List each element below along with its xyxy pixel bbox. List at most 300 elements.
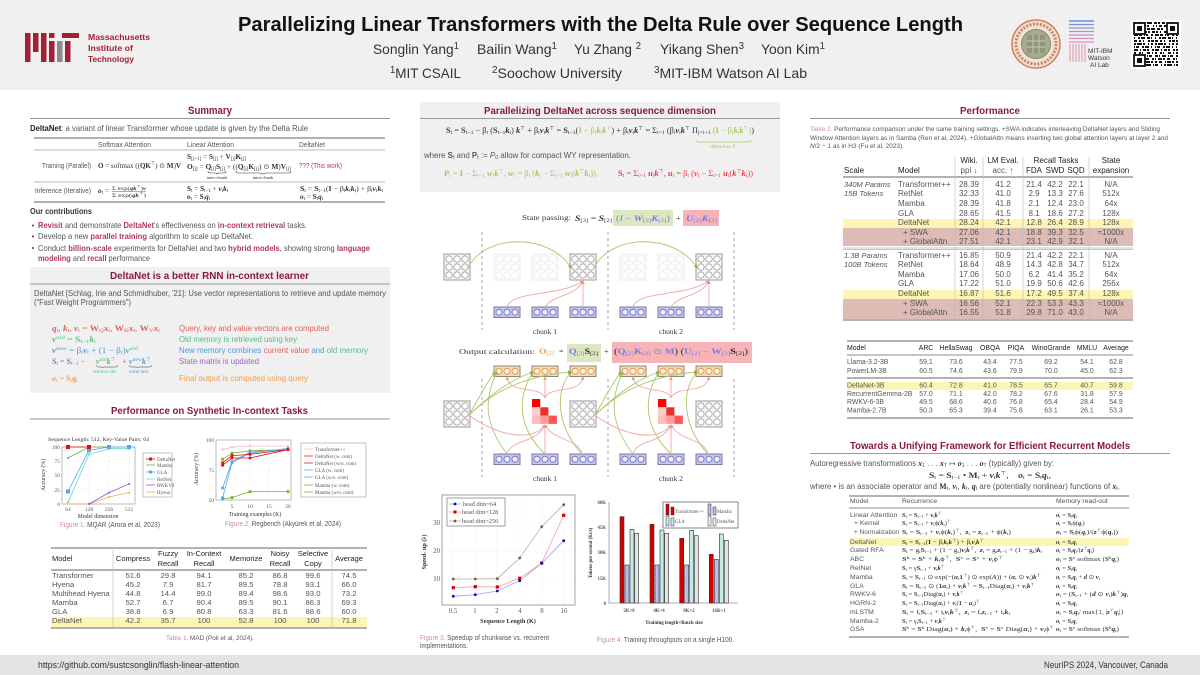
table 2: performance comparison: DeltaNet <box>898 289 930 298</box>
table 2: performance comparison: SWD <box>1046 166 1065 175</box>
memory read-out formulas: ot = Stqt <box>1056 583 1078 590</box>
update equations <box>52 324 161 384</box>
table 2: performance comparison: Transformer++ <box>898 251 951 260</box>
table 2: performance comparison: 22.1 <box>1068 180 1084 189</box>
formula: state passing: S[3] = S[2] <box>575 214 612 224</box>
table 1: MAD results: 85.2 <box>239 571 253 580</box>
table 2: performance comparison: 17.2 <box>1026 289 1042 298</box>
table 1: MAD results: 42.2 <box>126 616 140 625</box>
table 3: benchmark comparison: 73.6 <box>949 359 963 366</box>
table 1: MAD results: Compress <box>116 554 150 563</box>
heading: unifying framework: Towards a Unifying Framework for Efficient Recurrent Models <box>850 440 1130 452</box>
intro text: Autoregressive transformations x1 . . . xT ↦ o1 . . . oT (typically) given by: <box>810 459 1054 469</box>
caption: table 2: N/2 − 1 as in H3 (Fu et al, 2023). <box>810 143 904 150</box>
table 2: performance comparison: 16.85 <box>959 251 980 260</box>
table 2: performance comparison: 28.39 <box>959 199 980 208</box>
table 3: benchmark comparison: 78.2 <box>1009 391 1023 398</box>
table 2: performance comparison: 42.8 <box>1047 260 1063 269</box>
table 2: performance comparison: 27.51 <box>959 237 980 246</box>
update equations: St = St−1 − <box>52 357 87 367</box>
legend: Mamba <box>717 510 733 515</box>
formula: output calculation: Q[2]S[2] <box>569 347 598 357</box>
pink input connections <box>507 281 709 307</box>
chart: figure 2 Regbench: GLA (w. com) <box>315 469 344 474</box>
table 3: benchmark comparison: 69.2 <box>1044 359 1058 366</box>
chart: figure 4 throughput: Training length×Batch size <box>645 621 704 626</box>
recurrence formulas <box>902 511 1054 633</box>
chart: figure 2 Regbench: Transformer++ <box>315 448 346 453</box>
table 3: benchmark comparison: 40.7 <box>1080 382 1094 390</box>
chart: figure 1 MQAR: 256 <box>105 507 113 513</box>
update equations: vnewk⊤ <box>129 356 151 366</box>
logo: MIT-IBM Watson AI Lab <box>1069 21 1113 69</box>
chart: figure 1 MQAR: Sequence Length: 512, Key-Value Pairs: 64 <box>48 437 149 443</box>
table 2: performance comparison: 52.1 <box>995 299 1011 308</box>
table 3: benchmark comparison: 74.6 <box>949 368 963 375</box>
table 4: recurrent models: Memory read-out <box>1056 498 1108 505</box>
table 3: benchmark comparison: 65.4 <box>1044 399 1058 406</box>
table 2: performance comparison: 128x <box>1102 289 1120 298</box>
chart: figure 3 speedup: 30 <box>433 520 441 527</box>
chart: figure 2 Regbench: 10 <box>247 504 253 510</box>
table 3: benchmark comparison: 79.9 <box>1009 368 1023 375</box>
chunk labels: chunk 1 <box>533 474 557 483</box>
comparison table: Inference (Iterative) <box>35 186 91 195</box>
table 2: performance comparison: ≈1000x <box>1098 228 1124 237</box>
chart: figure 2 Regbench: 20 <box>285 504 291 510</box>
table 1: MAD results: 89.4 <box>239 589 254 598</box>
table 1: MAD results: 7.9 <box>163 580 173 589</box>
logo: MIT: Technology <box>88 55 135 64</box>
table 1: MAD results: 100 <box>274 616 286 625</box>
table 2: performance comparison: GLA <box>898 209 915 218</box>
table 2: performance comparison: 21.4 <box>1026 251 1042 260</box>
table 2: performance comparison: 41.4 <box>1047 270 1063 279</box>
table 2: performance comparison: 43.3 <box>1068 299 1084 308</box>
contributions list <box>32 221 370 263</box>
table 2: performance comparison: 41.8 <box>995 199 1011 208</box>
table 2: performance comparison: DeltaNet <box>898 218 930 227</box>
table 4: recurrent models: + Normalization <box>854 529 899 536</box>
table 3: benchmark comparison: 62.3 <box>1109 368 1123 375</box>
caption: figure 3: Figure 3. Speedup of chunkwise vs. recurrent <box>420 635 549 642</box>
table 2: performance comparison: 32.5 <box>1068 228 1084 237</box>
table 4: recurrent models: GLA <box>850 583 864 590</box>
memory read-out formulas: ot = Stqt <box>1056 512 1078 519</box>
update equations: vold = St−1kt <box>52 335 97 345</box>
table 2: performance comparison: 42.2 <box>1047 251 1063 260</box>
table 2: performance comparison: Transformer++ <box>898 180 951 189</box>
logo: MIT: Massachusetts <box>88 33 151 42</box>
table 4: recurrent models: Mamba-2 <box>850 618 879 625</box>
formula: state passing: U [2]K [2] <box>686 214 717 224</box>
description: ("Fast Weight Programmers") <box>34 298 131 307</box>
table 2: performance comparison: FDA <box>1026 166 1043 175</box>
intro text: DeltaNet: a variant of linear Transformer whose update is given by the Delta Rule <box>30 123 308 133</box>
description: DeltaNet [Schlag, Irie and Schmidhuber, '21]: Use vector representations to retrieve and update memory <box>34 289 387 298</box>
table 4: recurrent models: RWKV-6 <box>850 591 876 598</box>
formula: output calculation: O[2] <box>539 346 554 357</box>
chart: figure 2 Regbench: 75 <box>208 468 214 474</box>
comparison table: St = St−1(I − βtktkt) + βtvtkt <box>300 185 384 194</box>
comparison table: Softmax Attention <box>98 140 151 149</box>
chart: figure 3 speedup: head dim=128 <box>462 509 498 516</box>
table 4: recurrent models: ABC <box>850 556 864 563</box>
chart: figure 3 speedup: 2 <box>495 608 499 615</box>
caption: figure 2: Figure 2. Regbench (Akyürek et al, 2024) <box>225 521 341 528</box>
diagram: output calculation per chunk <box>444 366 734 483</box>
memory read-out formulas: ot = (St−1 + (d ⊙ vt)k⊤)qt <box>1056 590 1129 598</box>
table 4: recurrent models: RetNet <box>850 565 871 572</box>
table 1: MAD results: Memorize <box>230 554 262 563</box>
table 3: benchmark comparison: RWKV-6-3B <box>847 399 884 406</box>
logo: MIT-IBM Watson AI Lab: Watson <box>1088 55 1110 62</box>
chart: figure 2 Regbench: 5 <box>231 504 234 510</box>
chunk labels: chunk 1 <box>533 327 557 336</box>
table 1: MAD results: GLA <box>52 607 68 616</box>
chunk labels: chunk 2 <box>659 327 683 336</box>
table 2: performance comparison: 18.64 <box>959 260 980 269</box>
table 1: MAD results: 88.6 <box>306 607 320 616</box>
memory read-out formulas: ot = Stqt/ max{1, | z⊤qt|} <box>1056 608 1124 616</box>
table 4: recurrent models: Linear Attention <box>850 512 897 519</box>
table 3: benchmark comparison: 43.6 <box>983 368 997 375</box>
table 3: benchmark comparison: 50.3 <box>919 408 933 414</box>
chart: figure 1 MQAR <box>40 437 176 520</box>
footer band <box>0 655 1200 675</box>
chart: figure 3 speedup: 0.5 <box>449 608 458 615</box>
table 4: recurrent models <box>849 496 1129 637</box>
memory read-out formulas: ot = Stqt <box>1056 539 1078 546</box>
underbrace: defined as P <box>696 140 751 150</box>
table 3: benchmark comparison: 65.7 <box>1044 382 1058 390</box>
output rows <box>494 366 722 376</box>
table 1: MAD results: 89.5 <box>239 598 253 607</box>
table 2: performance comparison: 43.0 <box>1068 308 1084 317</box>
formula: state passing: + <box>676 214 681 223</box>
affiliations: 2Soochow University <box>492 65 622 81</box>
caption: figure 3 <box>420 635 549 650</box>
table 1: MAD results: 100 <box>307 616 319 625</box>
table 1: MAD results: Recall <box>270 559 291 568</box>
attention matrices <box>532 399 683 424</box>
update equations: voldk⊤ <box>96 356 116 366</box>
panel: performance <box>810 105 1170 418</box>
chart: figure 2 Regbench: Mamba (w. com) <box>315 484 350 489</box>
table 1: MAD results: 66.0 <box>342 580 356 589</box>
formula: output calculation: + <box>604 347 609 356</box>
table 2: performance comparison: 37.4 <box>1068 289 1084 298</box>
table 3: benchmark comparison: 42.0 <box>983 391 997 398</box>
panel: towards a unifying framework <box>809 440 1170 637</box>
caption: figure 3: implementations. <box>420 643 468 650</box>
table 1: MAD results: Copy <box>304 559 322 568</box>
table 2: performance comparison: 64x <box>1105 199 1117 208</box>
equation: general recurrence: St = St−1 • M t + vtk⊤, ot = Stqt, <box>929 470 1051 481</box>
table 2: performance comparison: 34.7 <box>1068 260 1084 269</box>
table 1: MAD results: 81.6 <box>273 607 287 616</box>
table 2: performance comparison: 42.6 <box>1068 279 1084 288</box>
caption: figure 1: Figure 1. MQAR (Arora et al, 2023) <box>60 522 160 529</box>
table 2: performance comparison: 42.9 <box>1047 237 1063 246</box>
table 2: performance comparison: State <box>1102 156 1121 165</box>
legend: Transformer++ <box>675 510 705 515</box>
table 1: MAD results: Hyena <box>52 580 75 589</box>
chart: figure 2 Regbench: 100 <box>206 438 214 444</box>
chart: figure 3 speedup: 1 <box>473 608 477 615</box>
table 2: performance comparison: N/A <box>1104 308 1118 317</box>
table 2: performance comparison: 340M Params <box>844 180 891 189</box>
table 4: recurrent models: HGRN-2 <box>850 600 876 607</box>
table 1: MAD results: 14.4 <box>161 589 176 598</box>
caption: figure 4: Figure 4. Training throughputs on a single H100. <box>597 637 734 644</box>
table 2: performance comparison: 42.1 <box>995 237 1011 246</box>
chart: figure 1 MQAR: Model dimension <box>78 514 118 520</box>
table 2: performance comparison: 2.9 <box>1028 189 1040 198</box>
table 3: benchmark comparison: 77.5 <box>1009 359 1023 366</box>
table 1: MAD results: Transformer <box>52 571 94 580</box>
contributions list: Conduct billion-scale experiments for DeltaNet and two hybrid models, showing strong language <box>38 244 370 253</box>
chart: figure 1 MQAR: 128 <box>85 507 93 513</box>
input rows <box>494 454 722 464</box>
table 2: performance comparison: 128x <box>1102 218 1120 227</box>
repository link: https://github.com/sustcsonglin/flash-linear-attention <box>38 660 239 671</box>
comparison table: St = St−1 + vtkt <box>187 185 229 194</box>
table 1: MAD results: Recall <box>158 559 179 568</box>
comparison table: ot = <box>98 187 109 196</box>
equation descriptions: Old memory is retrieved using key <box>179 335 298 344</box>
table 1: MAD results: 63.3 <box>239 607 253 616</box>
heading: our contributions: Our contributions <box>30 206 92 216</box>
table 1: MAD results: 6.9 <box>163 607 173 616</box>
chart: figure 4 throughput <box>589 501 738 626</box>
table 1: MAD results: 29.8 <box>161 571 175 580</box>
chart: figure 2 Regbench: Mamba (w/o. com) <box>315 491 354 496</box>
table 2: performance comparison: 50.9 <box>995 251 1011 260</box>
table 3: benchmark comparison: 45.0 <box>1080 368 1094 375</box>
memory read-out formulas: ot = Stqt/(z⊤qt) <box>1056 546 1094 554</box>
table 2: performance comparison: 1.3B Params <box>844 251 888 260</box>
table 2: performance comparison: 29.8 <box>1026 308 1042 317</box>
table 3: benchmark comparison: 39.4 <box>983 408 997 414</box>
comparison table: ??? (This work) <box>299 161 342 170</box>
authors: Yikang Shen3 <box>660 41 745 57</box>
chart: figure 4 throughput: 15K <box>597 577 606 582</box>
table 2: performance comparison: 32.33 <box>959 189 980 198</box>
table 2: performance comparison: LM Eval. <box>987 156 1019 165</box>
table 3: benchmark comparison: DeltaNet-3B <box>847 382 885 390</box>
chart: figure 2 Regbench: DeltaNet (w/o. com) <box>315 462 357 467</box>
table 1: MAD results: 90.4 <box>197 598 212 607</box>
table 1: MAD results: 98.6 <box>273 589 287 598</box>
throughput bars <box>620 517 728 603</box>
table 3: benchmark comparison: 75.8 <box>1009 408 1023 414</box>
table 1: MAD results: 86.8 <box>273 571 287 580</box>
chunk labels <box>533 474 683 483</box>
chart: figure 1 MQAR: RWKV4 <box>157 484 175 489</box>
legend: DeltaNet <box>717 520 735 525</box>
chart: figure 3 speedup: head dim=256 <box>462 518 498 525</box>
memory read-out formulas: ot = Stϕ(qt) <box>1056 520 1085 527</box>
memory read-out formulas: ot = Sv softmax ( Skqt) <box>1056 625 1119 633</box>
chart: figure 2 Regbench: GLA (w/o. com) <box>315 476 349 481</box>
logo: MIT-IBM Watson AI Lab: MIT-IBM <box>1088 48 1113 55</box>
table 2: performance comparison: 32.1 <box>1068 237 1084 246</box>
chart: figure 2 Regbench: Accuracy (%) <box>193 453 200 485</box>
table 2: performance comparison: 16.56 <box>959 299 980 308</box>
table 1: MAD results: 45.2 <box>126 580 140 589</box>
chart: figure 1 MQAR: 64 <box>65 507 71 513</box>
memory read-out formulas: ot = Stϕ(qt)/(z⊤ϕ(qt)) <box>1056 528 1118 536</box>
formula: output calculation <box>459 342 752 363</box>
table 2: performance comparison: 8.1 <box>1028 209 1040 218</box>
table 2: performance comparison: 27.2 <box>1068 209 1084 218</box>
comparison table: Σ exp( qk⊤)v <box>112 185 147 192</box>
memory read-out formulas: ot = Sv softmax ( Skqt) <box>1056 555 1119 563</box>
table 2: performance comparison: 50.0 <box>995 270 1011 279</box>
authors: Yu Zhang 2 <box>574 41 641 57</box>
table 2: performance comparison: + GlobalAttn <box>903 308 947 317</box>
table 2: performance comparison: 49.5 <box>1047 289 1063 298</box>
table 2: performance comparison: Recall Tasks <box>1034 156 1078 165</box>
table 3: benchmark comparison: 41.0 <box>983 382 997 390</box>
table 3: benchmark comparison: 72.8 <box>949 382 963 390</box>
table 2: performance comparison: Mamba <box>898 199 925 208</box>
table 1: MAD results: 35.7 <box>161 616 175 625</box>
formula: state passing: (I − W [2]K [2]) <box>616 214 670 224</box>
chart: figure 3 speedup: 4 <box>518 608 522 615</box>
memory read-out formulas <box>1056 512 1129 633</box>
table 2: performance comparison: 2.1 <box>1028 199 1040 208</box>
table 2: performance comparison: 41.0 <box>995 189 1011 198</box>
memory read-out formulas: ot = Stqt + d ⊙ vt <box>1056 574 1101 581</box>
table 1: MAD results: Mamba <box>52 598 78 607</box>
table 3: benchmark comparison: 59.8 <box>1109 382 1123 390</box>
comparison table: Linear Attention <box>187 140 234 149</box>
table 3: benchmark comparison: 76.8 <box>1009 399 1023 406</box>
panel: performance on synthetic in-context tasks <box>30 405 390 642</box>
affiliations: 3MIT-IBM Watson AI Lab <box>654 65 807 81</box>
memory read-out formulas: ot = Stqt <box>1056 600 1078 607</box>
table 1: MAD results: 99.6 <box>306 571 320 580</box>
table 3: benchmark comparison: PowerLM-3B <box>847 368 887 375</box>
table 1: MAD results: Recall <box>194 559 215 568</box>
table 2: performance comparison: + SWA <box>903 299 928 308</box>
table 2: performance comparison: 28.9 <box>1068 218 1084 227</box>
chart: figure 3 speedup: 10 <box>433 576 441 583</box>
recurrence formulas: St = St−1 + vtk⊤ <box>902 511 942 519</box>
table 2: performance comparison: acc. ↑ <box>993 166 1013 175</box>
authors <box>373 41 825 57</box>
table 2: performance comparison: RetNet <box>898 189 924 198</box>
table 2: performance comparison: 53.3 <box>1047 299 1063 308</box>
table 3: benchmark comparison: 54.9 <box>1109 399 1123 406</box>
affiliations <box>390 65 807 81</box>
authors: Bailin Wang1 <box>477 41 557 57</box>
table 1: MAD results: 89.5 <box>239 580 253 589</box>
chart: figure 4 throughput: 4K×4 <box>653 609 665 614</box>
table 2: performance comparison: 13.3 <box>1047 189 1063 198</box>
contributions list: modeling and recall performance <box>38 254 150 263</box>
recurrence formulas: Sk = Sk Diag( αt) + ktϕ⊤, Sv = Sv Diag( αt) + vtϕ⊤ <box>902 625 1054 633</box>
table 2: performance comparison: 12.8 <box>1026 218 1042 227</box>
chart: figure 2 Regbench: DeltaNet (w. com) <box>315 455 352 460</box>
table 1: MAD results: Model <box>52 554 73 563</box>
logo: MIT-IBM Watson AI Lab: AI Lab <box>1090 62 1109 69</box>
chart: figure 1 MQAR: 50 <box>54 473 60 479</box>
underbrace: defined as P: defined as: P <box>711 145 736 150</box>
table 1: MAD results: Average <box>335 554 363 563</box>
chart: figure 1 MQAR: 25 <box>54 488 60 494</box>
table 3: benchmark comparison: 43.4 <box>983 359 997 366</box>
panel: DeltaNet is a better RNN in-context learner <box>30 267 390 393</box>
contributions list: Revisit and demonstrate DeltaNet's effectiveness on in-context retrieval tasks. <box>38 221 307 230</box>
table 2: performance comparison: 28.39 <box>959 180 980 189</box>
green connections <box>469 372 708 454</box>
table 1: MAD results: 71.8 <box>342 616 356 625</box>
table 1: MAD results: 99.0 <box>197 589 211 598</box>
panel: parallelizing DeltaNet across sequence dimension <box>420 102 780 192</box>
table 2: performance comparison: 512x <box>1102 260 1120 269</box>
comparison table: DeltaNet <box>299 140 325 149</box>
table 3: benchmark comparison: PIQA <box>1008 345 1025 352</box>
table 2: performance comparison: 26.4 <box>1047 218 1063 227</box>
state matrices <box>444 254 722 280</box>
table 2: performance comparison: 39.3 <box>1047 228 1063 237</box>
table 1: MAD results <box>51 548 367 628</box>
comparison table: Training (Parallel) <box>42 161 91 170</box>
table 3: benchmark comparison: 70.0 <box>1044 368 1058 375</box>
heading: parallelizing: Parallelizing DeltaNet across sequence dimension <box>484 105 716 117</box>
update equations: vnew = β tvt + (1 − β t)vold <box>52 346 138 356</box>
recurrence formulas: St = g tSt−1 + (1 − g t)vtk⊤, zt = g tzt−1 + (1 − g t)kt <box>902 546 1043 554</box>
table 2: performance comparison: + GlobalAttn <box>903 237 947 246</box>
caption: table 1: Table 1. MAD (Poli et al, 2024). <box>166 635 254 642</box>
chart: figure 3 speedup: Speed- up (λ) <box>421 534 428 570</box>
formula: output calculation: Output calculation: <box>459 347 535 356</box>
table 3: benchmark comparison: 49.5 <box>919 399 933 406</box>
table 1: MAD results: 94.1 <box>197 571 211 580</box>
table 3: benchmark comparison: Llama-3.2-3B <box>847 359 889 366</box>
table 1: MAD results: 93.1 <box>306 580 320 589</box>
table 3: benchmark comparison: ARC <box>919 345 933 352</box>
table 1: MAD results: 44.8 <box>126 589 140 598</box>
table 3: benchmark comparison: 60.4 <box>919 382 933 390</box>
table 3: benchmark comparison: 71.1 <box>949 391 963 398</box>
table 3: benchmark comparison: 63.1 <box>1044 408 1058 414</box>
description <box>34 289 387 307</box>
formula: state passing <box>522 210 719 226</box>
header band <box>0 0 1200 90</box>
table 2: performance comparison: N/A <box>1104 180 1118 189</box>
chart: figure 2 Regbench <box>193 438 366 518</box>
recurrence formulas: St = γSt−1 + vtk⊤ <box>902 564 945 572</box>
update equations: write new <box>129 370 149 375</box>
legend <box>663 502 738 528</box>
title: Parallelizing Linear Transformers with the Delta Rule over Sequence Length <box>238 14 963 36</box>
table 3: benchmark comparison: 60.5 <box>919 368 933 375</box>
framework note: where • is an associate operator and Mt, vt, kt, qt are (potentially nonlinear) functions of xt. <box>809 482 1120 492</box>
recurrence formulas: St = St−1Diag(αt) + vtk⊤ <box>902 590 964 598</box>
table 1: MAD results: 60.0 <box>342 607 356 616</box>
table 2: performance comparison: 28.24 <box>959 218 980 227</box>
chart: figure 4 throughput: 16K×1 <box>712 609 726 614</box>
equation: P_t: Pt = I − Σi=1 wik⊤, wt = βt (kt − Σi=1 wi(k⊤kt)), <box>444 168 598 179</box>
table 1: MAD results: 52.8 <box>239 616 253 625</box>
comparison table: intra-chunk <box>253 175 274 180</box>
chart: figure 2 Regbench: 15 <box>266 504 272 510</box>
pink connections <box>469 377 709 454</box>
